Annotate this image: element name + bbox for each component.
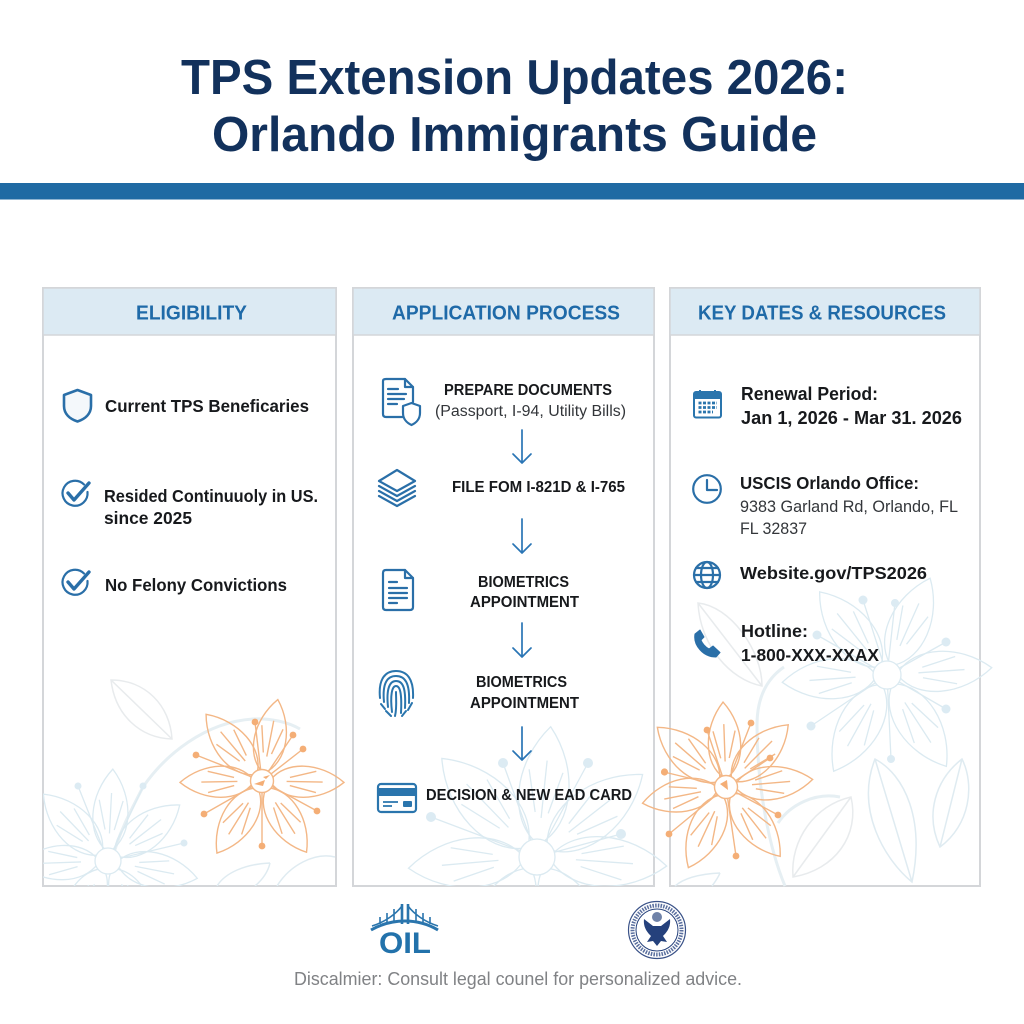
icon: shield	[64, 390, 91, 422]
item: continuous residence: since 2025	[104, 508, 192, 528]
item: renewal period	[694, 384, 962, 428]
icon: document with shield	[383, 379, 420, 425]
item: website: Website.gov/TPS2026	[740, 563, 927, 583]
title	[181, 51, 848, 162]
item: USCIS office: USCIS Orlando Office:	[740, 473, 919, 493]
step: biometrics appointment A: BIOMETRICS	[478, 574, 569, 591]
step: biometrics appointment B: BIOMETRICS	[476, 674, 567, 691]
icon: check circle	[63, 481, 89, 506]
arrow 3	[513, 623, 531, 657]
item: renewal period: Jan 1, 2026 - Mar 31. 2026	[741, 408, 962, 428]
item: current beneficiaries: Current TPS Beneficaries	[105, 396, 309, 416]
icon: card	[378, 784, 416, 812]
arrow 2	[513, 519, 531, 553]
item: current beneficiaries	[64, 390, 309, 422]
item: website	[694, 562, 927, 588]
step: decision and EAD card	[378, 784, 632, 812]
item: continuous residence: Resided Continuuoly in US.	[104, 486, 318, 506]
arrow 1	[513, 430, 531, 463]
logo: government seal	[628, 902, 686, 958]
icon: check circle	[63, 570, 89, 595]
item: hotline: 1-800-XXX-XXAX	[741, 645, 879, 665]
eligibility heading: ELIGIBILITY	[136, 302, 247, 324]
icon: fingerprint	[380, 671, 413, 716]
header divider bar	[0, 183, 1024, 200]
icon: phone	[695, 630, 720, 657]
step: biometrics appointment B: APPOINTMENT	[470, 695, 580, 712]
step: prepare documents: PREPARE DOCUMENTS	[444, 382, 612, 399]
item: continuous residence	[63, 481, 318, 528]
step: biometrics appointment A	[383, 570, 580, 611]
icon: calendar	[694, 390, 721, 418]
icon: document	[383, 570, 413, 610]
panel: key dates and resources	[639, 288, 993, 886]
arrow 4	[513, 727, 531, 760]
item: hotline: Hotline:	[741, 621, 808, 641]
logo: OIL bridge: OIL	[379, 927, 431, 960]
eligibility decorative flowers	[43, 679, 345, 886]
item: USCIS office: FL 32837	[740, 519, 807, 538]
title: Orlando Immigrants Guide	[212, 108, 817, 162]
item: no felony	[63, 570, 287, 595]
panel: eligibility	[42, 287, 345, 887]
step: file form: FILE FOM I-821D & I-765	[452, 479, 625, 496]
logo: OIL bridge	[371, 904, 438, 960]
panel: application process	[352, 287, 668, 887]
icon: clock	[693, 475, 721, 503]
step: biometrics appointment A: APPOINTMENT	[470, 594, 580, 611]
step: decision and EAD card: DECISION & NEW EAD CARD	[426, 787, 632, 804]
resources heading: KEY DATES & RESOURCES	[698, 302, 946, 324]
step: biometrics appointment B	[380, 671, 580, 716]
step: file form	[379, 470, 625, 506]
item: renewal period: Renewal Period:	[741, 384, 878, 404]
icon: globe	[694, 562, 720, 588]
step: prepare documents: (Passport, I-94, Utility Bills)	[435, 403, 626, 420]
process heading: APPLICATION PROCESS	[392, 302, 620, 324]
item: no felony: No Felony Convictions	[105, 575, 287, 595]
title: TPS Extension Updates 2026:	[181, 51, 848, 105]
item: hotline	[695, 621, 879, 665]
item: USCIS office	[693, 473, 958, 538]
item: USCIS office: 9383 Garland Rd, Orlando, FL	[740, 497, 958, 516]
disclaimer: Discalmier: Consult legal counel for personalized advice.	[294, 969, 742, 989]
step: prepare documents	[383, 379, 626, 425]
icon: stacked layers	[379, 470, 415, 506]
resources decorative flowers and leaves	[639, 570, 993, 886]
process decorative flower	[408, 726, 668, 886]
